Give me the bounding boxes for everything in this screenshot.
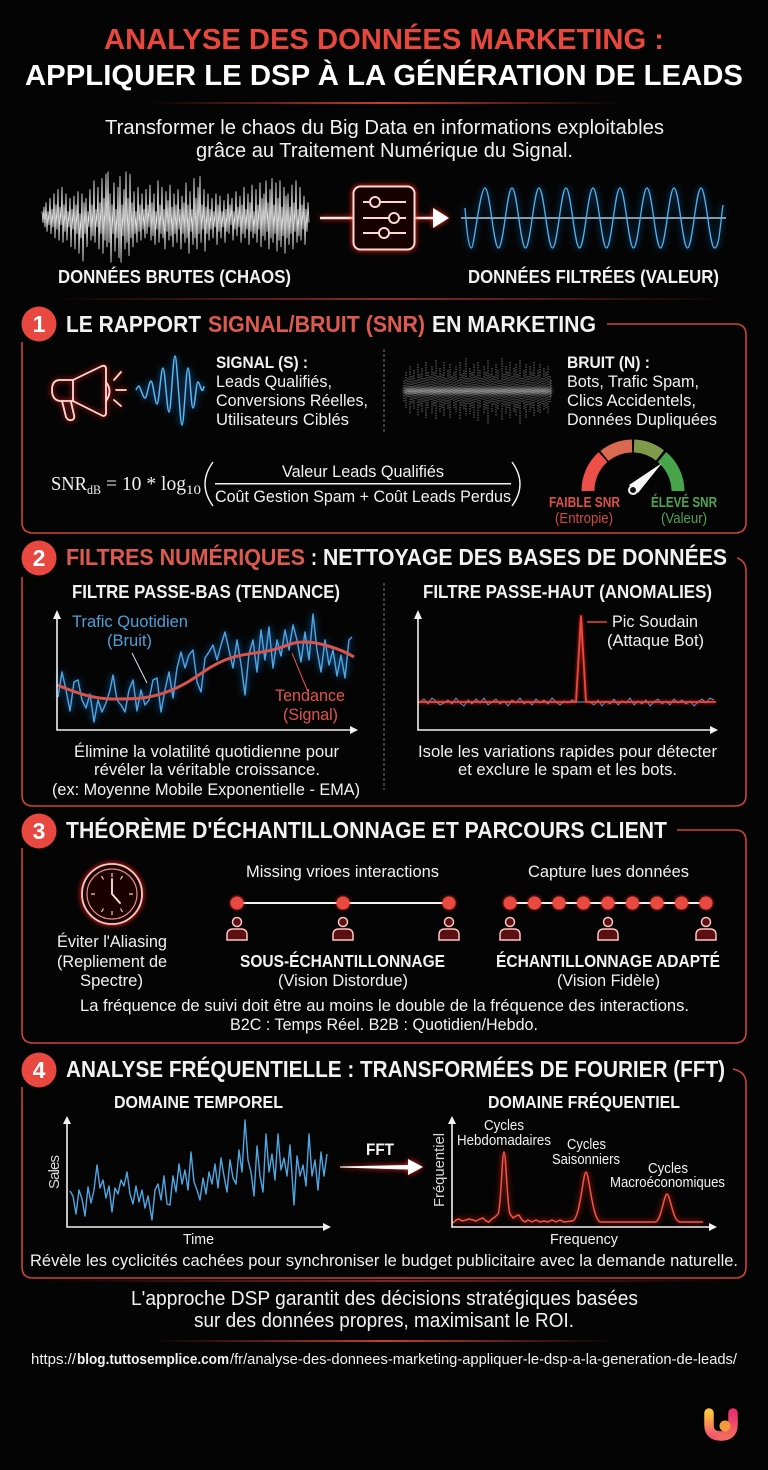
timeline: undersampling: (Vision Distordue) [278, 971, 408, 990]
gauge labels [549, 494, 717, 527]
SNR formula: dB [87, 482, 101, 497]
arrow through filter [320, 208, 449, 228]
caption: high-pass: Isole les variations rapides pour détecter [418, 742, 717, 761]
sample dots [230, 896, 456, 910]
heading 1: LE RAPPORT [66, 311, 201, 337]
label: trend: Tendance [275, 686, 345, 705]
label: trend [275, 653, 345, 724]
filtered sine waveform [461, 188, 726, 248]
SNR formula: = 10 * log [106, 473, 186, 495]
text: signal: SIGNAL (S) : [216, 353, 308, 372]
customer icons [500, 918, 716, 940]
peak label: macroeconomic: Macroéconomiques [610, 1175, 725, 1191]
label: sudden spike [587, 612, 704, 650]
text: aliasing [57, 932, 167, 990]
SNR formula: Valeur Leads Qualifiés [282, 462, 444, 481]
title line 1: ANALYSE DES DONNÉES MARKETING : [104, 22, 664, 56]
number badge 1: 1 [33, 311, 46, 337]
text: noise [567, 353, 717, 429]
timeline: adapted sampling [496, 862, 720, 990]
panel frame [22, 558, 746, 806]
caption: low-pass [52, 742, 360, 799]
text: signal: Utilisateurs Ciblés [216, 410, 349, 429]
text: noise: Clics Accidentels, [567, 391, 696, 410]
label: daily traffic: (Bruit) [107, 631, 152, 650]
number badge 2: 2 [33, 545, 45, 571]
footer conclusion: L'approche DSP garantit des décisions stratégiques basées [131, 1288, 638, 1310]
number badge 1 [22, 306, 56, 342]
timeline: adapted sampling: Capture lues données [528, 862, 689, 881]
arrow: FFT [340, 1141, 423, 1175]
text: aliasing: Éviter l'Aliasing [57, 932, 167, 951]
needle [629, 463, 662, 494]
icon: filter sliders [354, 186, 414, 250]
noise waveform [404, 358, 551, 424]
SNR formula: Coût Gestion Spam + Coût Leads Perdus [215, 487, 511, 506]
SNR formula: SNR [51, 473, 88, 495]
label: filtered data: DONNÉES FILTRÉES (VALEUR) [468, 266, 719, 287]
peak label: macroeconomic: Cycles [648, 1161, 688, 1177]
subheading: frequency domain: DOMAINE FRÉQUENTIEL [488, 1091, 680, 1112]
caption: low-pass: révéler la véritable croissance. [94, 760, 320, 779]
gauge labels: (Entropie) [555, 511, 613, 527]
caption: tracking frequency: B2C : Temps Réel. B2B : Quotidien/Hebdo. [230, 1015, 538, 1034]
text: aliasing: (Repliement de [57, 952, 167, 971]
heading 1: EN MARKETING [432, 311, 596, 337]
source URL: https:// [31, 1351, 77, 1368]
customer icons [227, 918, 459, 940]
axis label: time: Time [183, 1232, 214, 1248]
heading 1 [66, 311, 596, 337]
subheading: low-pass: FILTRE PASSE-BAS (TENDANCE) [72, 581, 340, 602]
text: aliasing: Spectre) [80, 971, 143, 990]
heading 2: : [311, 544, 317, 570]
axis label: frequency x: Frequency [550, 1232, 619, 1248]
text: noise: Bots, Trafic Spam, [567, 372, 699, 391]
caption: high-pass [418, 742, 717, 779]
subtitle: Transformer le chaos du Big Data en informations exploitables [105, 116, 664, 139]
text: signal: Conversions Réelles, [216, 391, 368, 410]
peak label: seasonal [552, 1137, 620, 1168]
number badge 3 [22, 814, 56, 848]
chart: low-pass [53, 610, 358, 734]
chart: time domain [46, 1116, 331, 1248]
source URL: blog.tuttosemplice.com [77, 1351, 229, 1368]
axis label: sales: Sales [46, 1155, 63, 1189]
heading 2: NETTOYAGE DES BASES DE DONNÉES [323, 543, 727, 570]
timeline: undersampling: SOUS-ÉCHANTILLONNAGE [240, 950, 445, 971]
footer conclusion: sur des données propres, maximisant le ROI. [194, 1310, 574, 1332]
text: noise: Données Dupliquées [567, 410, 717, 429]
caption: cyclicities: Révèle les cyclicités cachées pour synchroniser le budget publicitaire avec la demande naturelle. [30, 1251, 738, 1270]
text: signal [216, 353, 368, 429]
subheading: time domain: DOMAINE TEMPOREL [114, 1092, 283, 1112]
peak label: weekly: Hebdomadaires [457, 1133, 551, 1149]
caption: low-pass: (ex: Moyenne Mobile Exponentielle - EMA) [52, 780, 360, 799]
gauge labels: (Valeur) [661, 511, 707, 527]
peak label: seasonal: Saisonniers [552, 1152, 620, 1168]
panel 4: frequency analysis [22, 1052, 746, 1278]
title line 2: APPLIQUER LE DSP À LA GÉNÉRATION DE LEADS [25, 58, 743, 92]
subtitle: grâce au Traitement Numérique du Signal. [196, 139, 573, 162]
heading 2: FILTRES NUMÉRIQUES [66, 543, 305, 570]
panel 2: digital filters [22, 540, 746, 806]
chart: frequency domain [431, 1116, 725, 1248]
heading 2 [66, 543, 727, 570]
number badge 4 [22, 1052, 56, 1088]
label: daily traffic [72, 612, 188, 683]
panel 3: sampling theorem [22, 814, 746, 1043]
gauge labels: ÉLEVÉ SNR [651, 494, 717, 511]
text: noise: BRUIT (N) : [567, 353, 650, 372]
timeline: undersampling: Missing vrioes interactions [246, 862, 439, 881]
caption: tracking frequency: La fréquence de suivi doit être au moins le double de la fréquence des interactions. [80, 996, 689, 1015]
caption: high-pass: et exclure le spam et les bots. [458, 760, 677, 779]
label: sudden spike: (Attaque Bot) [607, 631, 704, 650]
label: daily traffic: Trafic Quotidien [72, 612, 188, 631]
logo [709, 1413, 733, 1436]
number badge 3: 3 [33, 818, 45, 844]
gauge labels: FAIBLE SNR [549, 495, 620, 511]
footer conclusion [131, 1288, 638, 1332]
arrow: FFT: FFT [366, 1141, 394, 1159]
header: title and subtitle [25, 22, 743, 162]
chart: high-pass [414, 610, 718, 734]
number badge 4: 4 [33, 1057, 46, 1083]
chaos to value diagram [42, 172, 726, 287]
label: trend: (Signal) [283, 705, 338, 724]
timeline: adapted sampling: ÉCHANTILLONNAGE ADAPTÉ [496, 950, 720, 971]
raw chaotic waveform [42, 172, 309, 262]
icon: clock [82, 864, 142, 924]
SNR formula [51, 462, 520, 506]
subtitle [105, 116, 664, 162]
subheading: high-pass: FILTRE PASSE-HAUT (ANOMALIES) [423, 581, 712, 602]
timeline: undersampling [227, 862, 459, 990]
caption: low-pass: Élimine la volatilité quotidienne pour [74, 742, 339, 761]
panel frame [22, 1069, 746, 1278]
panel frame [22, 324, 746, 533]
gauge [588, 446, 678, 494]
text: signal: Leads Qualifiés, [216, 372, 332, 391]
panel 1: SNR [22, 306, 746, 533]
number badge 2 [22, 540, 56, 576]
SNR formula: 10 [186, 482, 201, 497]
axis label: frequency y: Fréquentiel [431, 1133, 448, 1207]
heading 1: SIGNAL/BRUIT (SNR) [208, 311, 425, 337]
peak label: weekly: Cycles [484, 1118, 524, 1134]
label: raw data: DONNÉES BRUTES (CHAOS) [58, 266, 291, 287]
peak label: macroeconomic [610, 1161, 725, 1191]
timeline: adapted sampling: (Vision Fidèle) [557, 971, 660, 990]
label: sudden spike: Pic Soudain [612, 612, 698, 631]
sample dots [504, 896, 712, 910]
heading 3: THÉORÈME D'ÉCHANTILLONNAGE ET PARCOURS CLIENT [66, 816, 667, 843]
icon: megaphone [52, 366, 126, 420]
source URL: /fr/analyse-des-donnees-marketing-appliquer-le-dsp-a-la-generation-de-leads/ [230, 1351, 738, 1368]
signal wave [136, 356, 204, 425]
peak label: weekly [457, 1118, 551, 1149]
panel frame [22, 830, 746, 1043]
peak label: seasonal: Cycles [567, 1137, 606, 1153]
caption: tracking frequency [80, 996, 689, 1034]
